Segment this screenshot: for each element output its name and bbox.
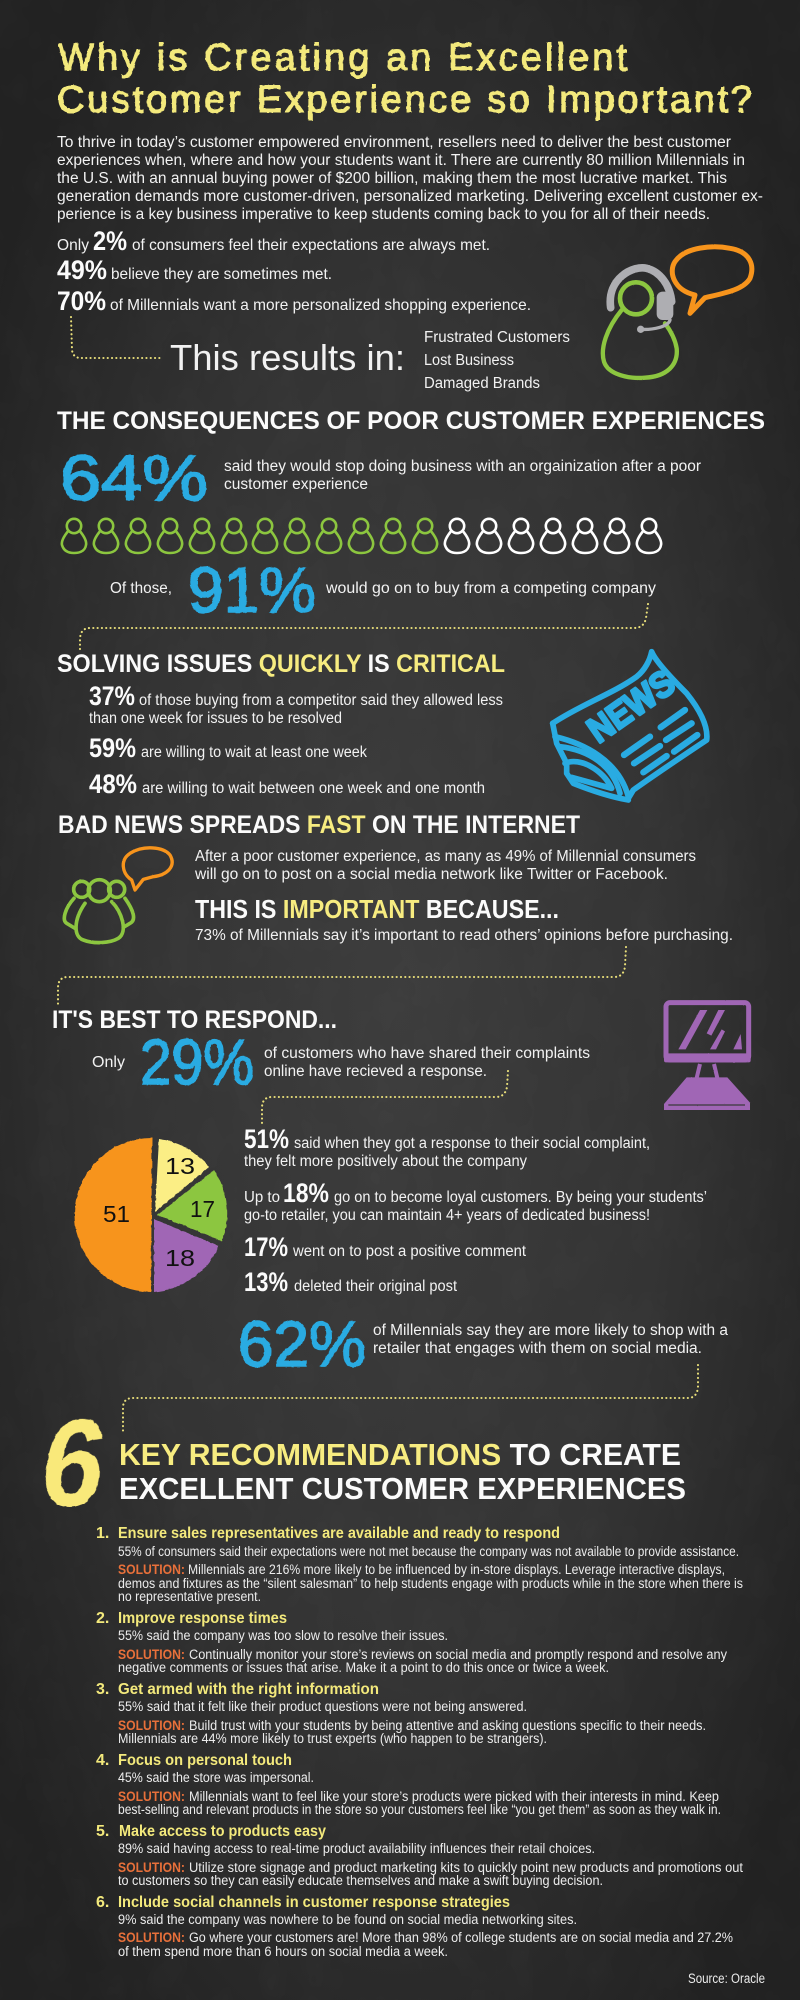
intro paragraph: experiences when, where and how your students want it. There are currently 80 million Millennials in (57, 152, 745, 169)
stat: 17 percent (244, 1232, 527, 1262)
stat: 37 percent (89, 681, 503, 727)
panel: consequences (57, 407, 765, 652)
stat: 48 percent: 48% (89, 769, 137, 799)
recommendation 2: 2. (96, 1610, 109, 1627)
opinions text: 73% of Millennials say it’s important to read others’ opinions before purchasing. (195, 927, 733, 944)
recommendation 3: 55% said that it felt like their product questions were not being answered. (118, 1699, 527, 1714)
social media text (194, 848, 696, 883)
pie chart: 18 (165, 1245, 195, 1271)
recommendation 2 (96, 1610, 727, 1675)
recommendation 5: Make access to products easy (119, 1823, 326, 1840)
stat: 2 percent: 2% (93, 226, 127, 256)
recommendation 6 (96, 1894, 733, 1959)
recommendation 3: Get armed with the right information (118, 1681, 379, 1698)
recommendation 3: Millennials are 44% more likely to trust experts (who happen to be strangers). (118, 1731, 547, 1746)
stat: 59 percent (89, 733, 367, 763)
social media text: After a poor customer experience, as many as 49% of Millennial consumers (195, 848, 696, 865)
recommendation 1: 1. (96, 1525, 109, 1542)
stat: 48 percent (89, 769, 485, 799)
panel: bad news spreads (58, 811, 733, 1005)
recommendation 6: Include social channels in customer response strategies (118, 1894, 510, 1911)
big numeral six: 6 (33, 1395, 115, 1533)
stat: 59 percent: 59% (89, 733, 136, 763)
stat: 70 percent: 70% (57, 286, 106, 316)
stat: 49 percent: 49% (57, 255, 107, 285)
competing company text: would go on to buy from a competing company (325, 580, 656, 597)
stat: 48 percent: are willing to wait between one week and one month (142, 780, 485, 797)
source: Source: Oracle (688, 1971, 765, 1986)
recommendation 6: Go where your customers are! More than 98% of college students are on social media and 27.2% (189, 1930, 733, 1945)
heading: THE CONSEQUENCES OF POOR CUSTOMER EXPERIENCES (57, 407, 765, 435)
recommendation 6: 6. (96, 1894, 109, 1911)
intro paragraph: To thrive in today’s customer empowered environment, resellers need to deliver the best customer (57, 134, 731, 151)
intro paragraph (57, 134, 763, 223)
stat: 51 percent: they felt more positively about the company (244, 1153, 527, 1170)
recommendation 3: 3. (96, 1681, 109, 1698)
heading: KEY RECOMMENDATIONS TO CREATE (119, 1437, 681, 1472)
recommendation 4: 45% said the store was impersonal. (118, 1770, 314, 1785)
stat text (373, 1322, 728, 1357)
icon: newspaper (553, 652, 707, 800)
title (57, 37, 752, 121)
heading: BAD NEWS SPREADS FAST ON THE INTERNET (58, 811, 580, 839)
heading: EXCELLENT CUSTOMER EXPERIENCES (119, 1471, 686, 1506)
social media text: will go on to post on a social media network like Twitter or Facebook. (194, 866, 668, 883)
stat: 37 percent: of those buying from a competitor said they allowed less (139, 692, 503, 709)
recommendation 3: Build trust with your students by being attentive and asking questions specific to their needs. (189, 1718, 706, 1733)
stat: 51 percent: 51% (244, 1124, 289, 1154)
recommendation 4: Focus on personal touch (118, 1752, 292, 1769)
stat: 18 percent: Up to (244, 1189, 280, 1206)
recommendation 5 (96, 1823, 743, 1888)
recommendation 3 (96, 1681, 706, 1746)
stat: 13 percent: 13% (244, 1267, 288, 1297)
stat text (264, 1045, 590, 1080)
intro paragraph: perience is a key business imperative to keep students coming back to you for all of their needs. (57, 206, 710, 223)
recommendation 4: best-selling and relevant products in the store so your customers feel like “you get them” as soon as they walk in. (118, 1802, 721, 1817)
stat: 49 percent (57, 255, 332, 285)
heading: IT'S BEST TO RESPOND... (52, 1006, 337, 1034)
icon: group of people with speech bubble (64, 848, 172, 943)
panel: introduction (57, 37, 763, 392)
recommendation 2: SOLUTION: (118, 1647, 185, 1662)
stat text (224, 458, 701, 493)
stat text: customer experience (224, 476, 368, 493)
stat: 70 percent (57, 286, 531, 316)
stat text: online have recieved a response. (264, 1063, 487, 1080)
recommendation 5: to customers so they can easily educate themselves and make a swift buying decision. (118, 1873, 603, 1888)
recommendation 5: 89% said having access to real-time product availability influences their retail choices. (118, 1841, 595, 1856)
stat: 13 percent: deleted their original post (294, 1278, 458, 1295)
this results in: This results in: (170, 337, 405, 378)
recommendation 1 (96, 1525, 743, 1604)
stat: 17 percent: 17% (244, 1232, 288, 1262)
pie chart: 51 (103, 1201, 130, 1227)
stat: 2 percent (57, 226, 490, 256)
recommendation 1: Millennials are 216% more likely to be influenced by in-store displays. Leverage interactive displays, (188, 1562, 725, 1577)
recommendation 1: SOLUTION: (118, 1562, 185, 1577)
of those label: Of those, (110, 580, 172, 597)
stat: 18 percent: 18% (283, 1178, 329, 1208)
stat text: said they would stop doing business with an orgainization after a poor (224, 458, 701, 475)
only label: Only (92, 1054, 125, 1071)
people pictogram row (62, 519, 661, 553)
recommendation 5: Utilize store signage and product marketing kits to quickly point new products and promotions out (189, 1860, 743, 1875)
stat: 62 percent: 62% (238, 1308, 366, 1380)
recommendation 5: 5. (96, 1823, 109, 1840)
recommendation 2: negative comments or issues that arise. Make it a point to do this once or twice a week. (118, 1660, 609, 1675)
subheading: THIS IS IMPORTANT BECAUSE... (195, 894, 559, 924)
stat: 49 percent: believe they are sometimes met. (111, 266, 332, 283)
recommendation 1: no representative present. (118, 1589, 261, 1604)
stat: 18 percent: go-to retailer, you can maintain 4+ years of dedicated business! (244, 1207, 650, 1224)
stat: 2 percent: Only (57, 237, 89, 254)
stat text: retailer that engages with them on social media. (373, 1340, 702, 1357)
stat: 70 percent: of Millennials want a more personalized shopping experience. (110, 297, 531, 314)
panel: best to respond (52, 1003, 751, 1432)
stat: 18 percent: go on to become loyal customers. By being your students’ (334, 1189, 707, 1206)
icon: customer service agent with speech bubble (603, 247, 752, 378)
intro paragraph: the U.S. with an annual buying power of $200 billion, making them the most lucrative market. This (57, 170, 727, 187)
stat: 59 percent: are willing to wait at least one week (141, 744, 367, 761)
recommendation 2: Continually monitor your store’s reviews on social media and promptly respond and resolve any (189, 1647, 727, 1662)
results list: Frustrated Customers (424, 329, 570, 346)
heading: SOLVING ISSUES QUICKLY IS CRITICAL (57, 650, 505, 678)
stat: 51 percent (244, 1124, 650, 1170)
pie chart (74, 1138, 227, 1292)
stat: 37 percent: 37% (89, 681, 135, 711)
stat: 17 percent: went on to post a positive comment (292, 1243, 527, 1260)
stat: 51 percent: said when they got a response to their social complaint, (294, 1135, 650, 1152)
recommendation 4: SOLUTION: (118, 1789, 185, 1804)
recommendation 1: Ensure sales representatives are available and ready to respond (118, 1525, 560, 1542)
title: Why is Creating an Excellent (58, 37, 627, 79)
recommendation 4 (96, 1752, 721, 1817)
icon: computer monitor (664, 1003, 751, 1110)
recommendation 5: SOLUTION: (118, 1860, 185, 1875)
heading (119, 1437, 686, 1506)
stat: 2 percent: of consumers feel their expectations are always met. (132, 237, 490, 254)
icon: newspaper: NEWS (579, 662, 682, 751)
stat: 64 percent: 64% (60, 442, 208, 514)
stat: 91 percent: 91% (188, 554, 316, 626)
pie chart: 17 (190, 1196, 215, 1222)
title: Customer Experience so Important? (57, 79, 752, 121)
stat: 29 percent: 29% (140, 1026, 254, 1098)
stat text: of customers who have shared their complaints (264, 1045, 590, 1062)
panel: key recommendations (33, 1395, 765, 1986)
recommendation 3: SOLUTION: (118, 1718, 185, 1733)
results list (424, 329, 570, 392)
recommendation 4: Millennials want to feel like your store’s products were picked with their interests in mind. Keep (189, 1789, 719, 1804)
results list: Damaged Brands (424, 375, 540, 392)
results list: Lost Business (424, 352, 514, 369)
stat text: of Millennials say they are more likely to shop with a (373, 1322, 728, 1339)
panel: solving issues (57, 650, 707, 800)
stat: 18 percent (244, 1178, 707, 1224)
recommendation 6: 9% said the company was nowhere to be found on social media networking sites. (118, 1912, 577, 1927)
recommendation 4: 4. (96, 1752, 109, 1769)
recommendation 2: Improve response times (118, 1610, 287, 1627)
pie chart: 13 (165, 1153, 195, 1179)
stat: 37 percent: than one week for issues to be resolved (89, 710, 342, 727)
recommendation 2: 55% said the company was too slow to resolve their issues. (118, 1628, 448, 1643)
intro paragraph: generation demands more customer-driven, personalized marketing. Delivering excellent customer ex- (57, 188, 763, 205)
recommendation 1: demos and fixtures as the “silent salesman” to help students engage with products while in the store when there is (118, 1576, 743, 1591)
stat: 13 percent (244, 1267, 458, 1297)
recommendation 6: of them spend more than 6 hours on social media a week. (118, 1944, 448, 1959)
recommendation 6: SOLUTION: (118, 1930, 185, 1945)
